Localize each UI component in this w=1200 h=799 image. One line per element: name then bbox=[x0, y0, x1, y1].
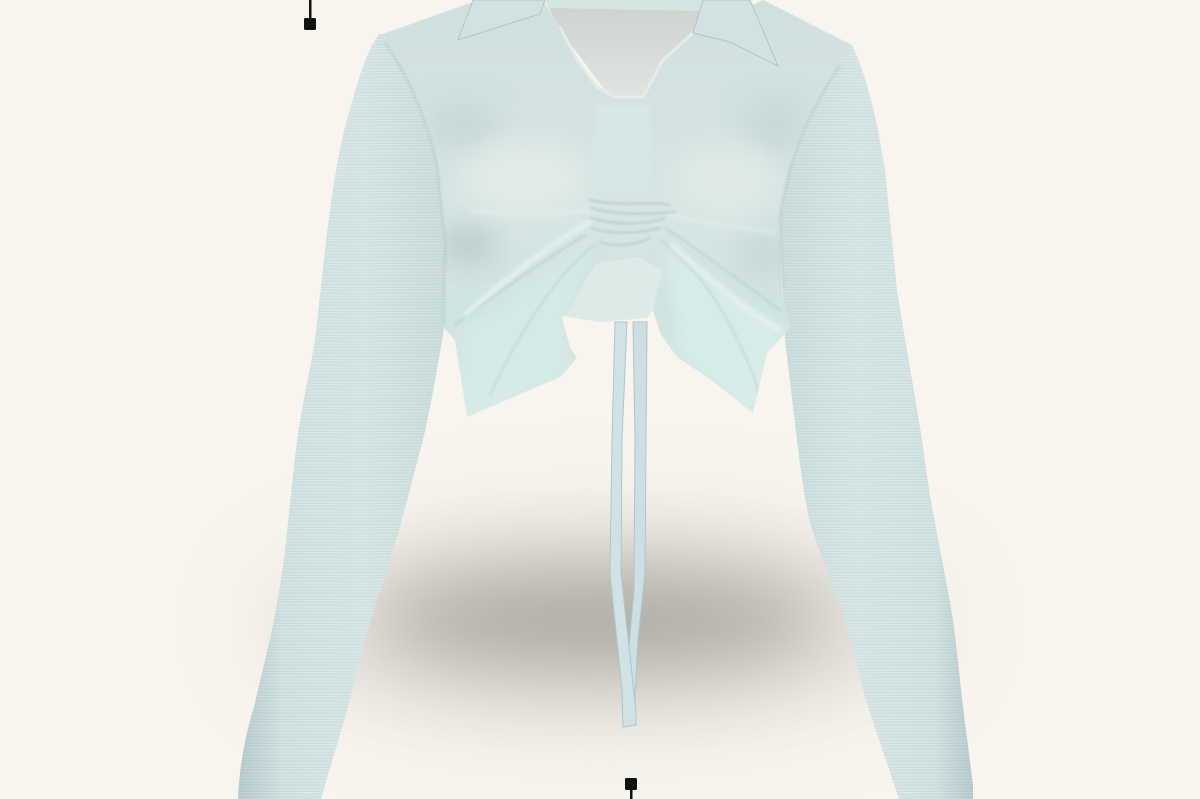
garment illustration bbox=[238, 0, 973, 799]
armhole seam shadows bbox=[385, 42, 840, 325]
bodice bbox=[380, 0, 852, 417]
shading bbox=[440, 110, 484, 142]
lower flaps bbox=[460, 245, 590, 417]
bottom marker bbox=[625, 778, 637, 799]
neckline trim bbox=[560, 27, 693, 97]
centre panel bbox=[594, 105, 650, 192]
left tie bbox=[610, 322, 636, 727]
floor shadow bbox=[260, 510, 940, 740]
right sleeve bbox=[780, 45, 973, 799]
left sleeve bbox=[238, 33, 445, 799]
inner neck lining bbox=[545, 0, 705, 100]
top marker bbox=[304, 0, 316, 30]
tie strings bbox=[610, 322, 647, 727]
right collar bbox=[693, 0, 778, 66]
right tie bbox=[626, 322, 647, 715]
centre lower panel bbox=[563, 257, 663, 322]
back neck band bbox=[545, 0, 705, 11]
fold highlights bbox=[465, 210, 780, 330]
gather folds bbox=[455, 200, 780, 395]
left collar bbox=[458, 0, 545, 40]
